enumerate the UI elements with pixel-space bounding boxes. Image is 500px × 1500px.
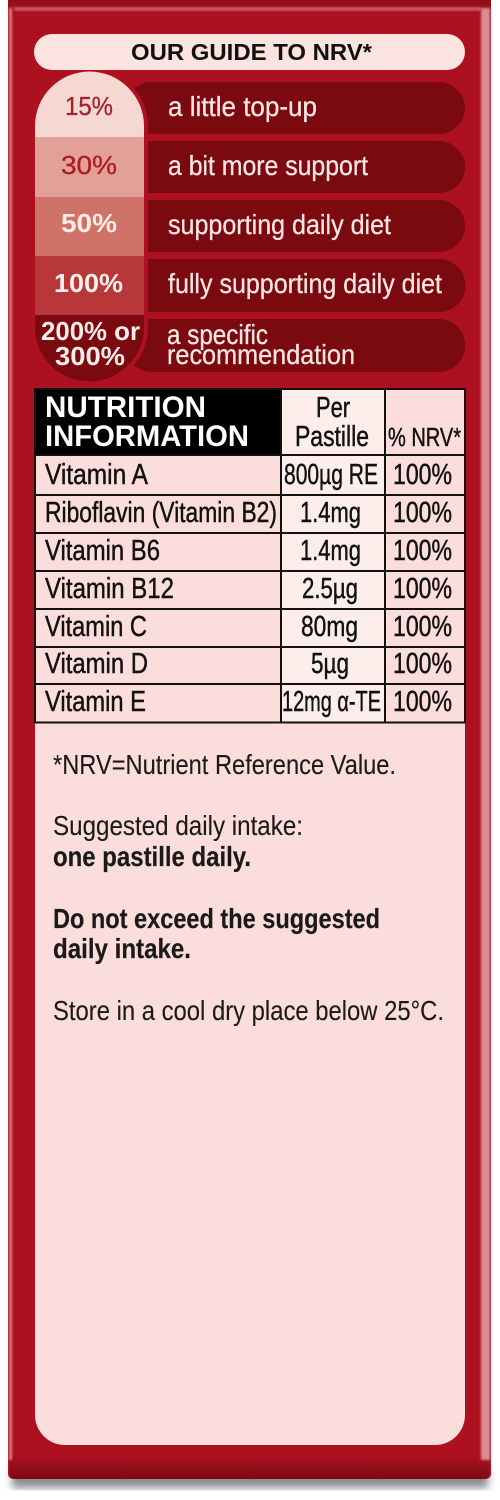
column header: percent NRV: % NRV* [388, 422, 461, 452]
lower cream panel [35, 715, 465, 1445]
description: fully supporting daily diet: fully supporting daily diet [168, 268, 442, 299]
scale column outline [31, 68, 148, 386]
row: vitamin C [45, 611, 452, 643]
table heading [34, 388, 281, 455]
description: a bit more support: a bit more support [168, 150, 368, 181]
row: vitamin B6: 100% [393, 535, 452, 567]
description: a little top-up: a little top-up [168, 91, 317, 122]
row: vitamin D: 100% [393, 648, 452, 680]
heading: our guide to NRV: OUR GUIDE TO NRV* [131, 39, 372, 65]
row: riboflavin: 100% [393, 497, 452, 529]
drop shadow [12, 1466, 488, 1488]
description: supporting daily diet: supporting daily diet [168, 209, 391, 240]
row: vitamin C: 100% [393, 611, 452, 643]
row: vitamin E: Vitamin E [45, 686, 146, 718]
description: a specific recommendation: recommendation [167, 339, 355, 370]
label: 15%: 15% [65, 91, 113, 121]
label: 200% or: 200% or [41, 316, 140, 346]
row: vitamin E [45, 686, 452, 718]
row: vitamin A: 800µg RE [284, 459, 378, 491]
description: a specific recommendation [167, 319, 355, 370]
suggested daily intake: Suggested daily intake: [53, 810, 303, 841]
storage instruction: Store in a cool dry place below 25°C. [53, 995, 444, 1026]
column header: per pastille: Pastille [295, 421, 369, 453]
row: vitamin B6 [45, 535, 452, 567]
row: vitamin A [45, 459, 452, 491]
row: vitamin D: Vitamin D [45, 648, 148, 680]
row: vitamin B12 [45, 573, 452, 605]
scale column segments [35, 70, 144, 385]
description: a specific recommendation: a specific [167, 319, 268, 350]
suggested daily intake [53, 810, 303, 872]
row: vitamin E: 100% [393, 686, 452, 718]
row: vitamin B12: 2.5µg [302, 573, 358, 605]
warning: do not exceed: Do not exceed the suggested [53, 903, 380, 934]
column header: per pastille [295, 392, 369, 453]
row: vitamin D [45, 648, 452, 680]
label: 30%: 30% [61, 150, 117, 180]
row bar: 50% [148, 200, 465, 252]
table heading: NUTRITION [45, 391, 206, 424]
warning: do not exceed [53, 903, 380, 964]
row: vitamin B6: Vitamin B6 [45, 535, 160, 567]
heading: our guide to NRV [34, 34, 465, 70]
label: 100%: 100% [54, 268, 123, 298]
row: vitamin B12: Vitamin B12 [45, 573, 174, 605]
table heading: INFORMATION [45, 420, 249, 453]
row bar: 30% [148, 141, 465, 193]
row: vitamin C: Vitamin C [45, 611, 147, 643]
label: 300%: 300% [55, 341, 125, 371]
row: vitamin E: 12mg α-TE [282, 686, 381, 718]
footnote: NRV definition: *NRV=Nutrient Reference Value. [53, 749, 396, 780]
row bar: 100% [148, 259, 466, 312]
suggested daily intake: one pastille daily. [53, 841, 251, 872]
warning: do not exceed: daily intake. [53, 933, 191, 964]
NRV guide rows [31, 68, 466, 386]
column header: per pastille: Per [316, 392, 350, 424]
row: vitamin B12: 100% [393, 573, 452, 605]
row: vitamin C: 80mg [301, 611, 358, 643]
row: vitamin A: Vitamin A [45, 459, 148, 491]
row: vitamin A: 100% [393, 459, 452, 491]
label: 50%: 50% [61, 208, 117, 238]
row bar: 15% [125, 82, 465, 134]
row: vitamin D: 5µg [311, 648, 349, 680]
row bar: 200% or 300% [125, 319, 465, 372]
row: vitamin B6: 1.4mg [300, 535, 361, 567]
per pastille column tint [281, 390, 385, 722]
row: riboflavin: 1.4mg [300, 497, 361, 529]
row: riboflavin: Riboflavin (Vitamin B2) [45, 497, 277, 529]
nutrition information table [34, 388, 466, 723]
